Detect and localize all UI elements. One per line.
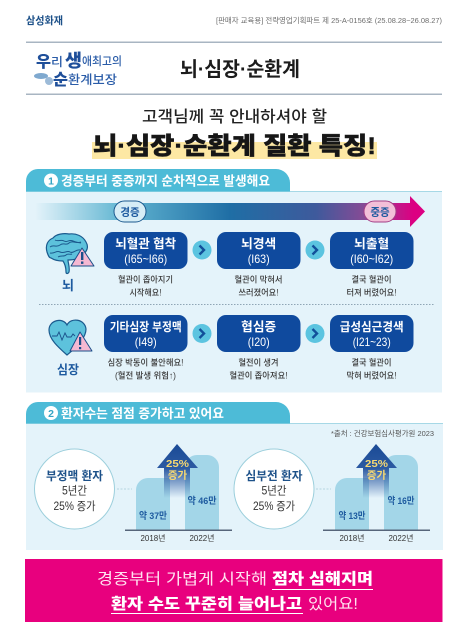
row 2 descriptions <box>108 356 396 380</box>
icon: brain <box>46 234 94 274</box>
bar chart: arrhythmia: 약 46만 <box>188 495 217 507</box>
row 1 descriptions: 결국 혈관이 <box>352 274 392 284</box>
bar chart: heart failure: 증가 <box>367 468 386 482</box>
section 1 tab: 1 <box>48 176 54 188</box>
logo: 애최고의 <box>82 54 122 68</box>
brand name: 삼성화재 <box>26 14 63 27</box>
row 2 descriptions: 혈전이 생겨 <box>238 356 278 368</box>
callout: heart failure: 심부전 환자 <box>246 469 302 483</box>
box: 뇌혈관 협착 <box>104 232 188 269</box>
row 1 descriptions: 혈관이 막혀서 <box>234 274 282 284</box>
bar chart: arrhythmia: 약 37만 <box>139 510 167 522</box>
label: brain: 뇌 <box>62 278 74 293</box>
bar chart: arrhythmia <box>125 444 232 543</box>
callout: arrhythmia: 25% 증가 <box>54 500 96 513</box>
banner: conclusion <box>25 559 442 622</box>
bar chart: heart failure: 약 13만 <box>338 510 366 522</box>
headline: 뇌·심장·순환계 질환 특징! <box>93 133 376 160</box>
box: 뇌출혈: (I60~I62) <box>350 252 393 266</box>
row 1 descriptions: 시작해요! <box>130 286 162 298</box>
box: 뇌경색: (I63) <box>248 252 270 266</box>
row 1 descriptions: 쓰러졌어요! <box>238 286 278 298</box>
arrow <box>192 324 212 343</box>
severity arrow: 중증 <box>370 206 390 218</box>
box: 뇌혈관 협착: 뇌혈관 협착 <box>115 236 177 251</box>
logo: 우 <box>36 53 51 71</box>
box: 뇌경색: 뇌경색 <box>241 237 276 251</box>
box: 기타심장 부정맥 <box>104 315 188 352</box>
logo <box>34 51 122 89</box>
bar chart: heart failure: 2022년 <box>388 533 414 543</box>
section 2 tab <box>26 402 290 424</box>
section 2 tab: 2 <box>48 408 54 420</box>
callout: arrhythmia <box>34 449 114 529</box>
page title: 뇌·심장·순환계 <box>180 58 300 81</box>
icon: heart <box>49 320 92 355</box>
logo: 생 <box>65 51 82 71</box>
box: 기타심장 부정맥: (I49) <box>135 335 157 349</box>
banner: conclusion: 경증부터 가볍게 시작해 <box>97 570 267 588</box>
bar chart: arrhythmia: 증가 <box>168 468 187 482</box>
section 2 tab: 환자수는 점점 증가하고 있어요 <box>61 406 224 421</box>
callout: arrhythmia: 5년간 <box>62 484 87 498</box>
callout: heart failure: 25% 증가 <box>253 500 295 513</box>
bar chart: arrhythmia: 2018년 <box>140 533 166 543</box>
section 1 tab: 경증부터 중증까지 순차적으로 발생해요 <box>61 174 270 188</box>
row 2 stages <box>104 315 414 352</box>
bar chart: heart failure: 2018년 <box>340 533 364 543</box>
box: 협심증: (I20) <box>248 335 270 349</box>
panel: section 2 <box>26 402 443 550</box>
subtitle: 고객님께 꼭 안내하셔야 할 <box>142 108 327 126</box>
banner: conclusion: 점차 심해지며 <box>272 570 373 588</box>
banner: conclusion: 환자 수도 꾸준히 늘어나고 <box>111 595 302 613</box>
row 2 descriptions: 결국 혈관이 <box>352 356 392 368</box>
label: heart: 심장 <box>57 363 79 377</box>
box: 급성심근경색: 급성심근경색 <box>340 320 404 334</box>
logo: 환계보장 <box>68 73 118 87</box>
severity arrow: 경증 <box>120 206 140 218</box>
box: 급성심근경색: (I21~23) <box>353 335 391 349</box>
arrow <box>306 324 324 343</box>
box: 협심증 <box>217 315 300 352</box>
approval notice: [판매자 교육용] 전략영업기획파트 제 25-A-0156호 (25.08.28~26.08.27) <box>216 16 442 25</box>
row 1 descriptions: 터져 버렸어요! <box>346 286 396 298</box>
arrow <box>192 240 212 260</box>
callout: heart failure <box>234 449 314 529</box>
row 2 descriptions: (혈전 발생 위험↑) <box>115 370 176 380</box>
box: 뇌출혈 <box>330 232 414 269</box>
row 1 descriptions: 혈관이 좁아지기 <box>118 274 173 284</box>
row 2 descriptions: 혈관이 좁아져요! <box>230 370 288 380</box>
row 1 stages <box>104 232 414 269</box>
panel: section 1 <box>26 169 442 392</box>
arrow <box>306 240 324 260</box>
box: 협심증: 협심증 <box>241 319 276 334</box>
box: 기타심장 부정맥: 기타심장 부정맥 <box>110 319 182 334</box>
row 2 descriptions: 심장 박동이 불안해요! <box>108 356 184 368</box>
section 1 tab <box>26 169 290 192</box>
banner: conclusion: 있어요! <box>308 595 358 613</box>
bar chart: heart failure: 25% <box>365 458 389 470</box>
logo: 순 <box>53 71 68 89</box>
row 2 descriptions: 막혀 버렸어요! <box>346 370 396 380</box>
bar chart: arrhythmia: 2022년 <box>190 533 214 543</box>
box: 뇌혈관 협착: (I65~I66) <box>124 252 167 266</box>
logo: 리 <box>51 55 63 69</box>
bar chart: heart failure: 약 16만 <box>388 495 415 507</box>
box: 뇌출혈: 뇌출혈 <box>354 236 389 251</box>
box: 뇌경색 <box>217 232 300 269</box>
bar chart: arrhythmia: 25% <box>166 458 190 470</box>
box: 급성심근경색 <box>330 315 414 352</box>
source note: *출처 : 건강보험심사평가원 2023 <box>331 429 434 438</box>
callout: heart failure: 5년간 <box>262 484 287 498</box>
bar chart: heart failure <box>323 444 430 543</box>
row 1 descriptions <box>118 274 396 298</box>
callout: arrhythmia: 부정맥 환자 <box>46 469 103 483</box>
severity arrow <box>35 196 425 227</box>
